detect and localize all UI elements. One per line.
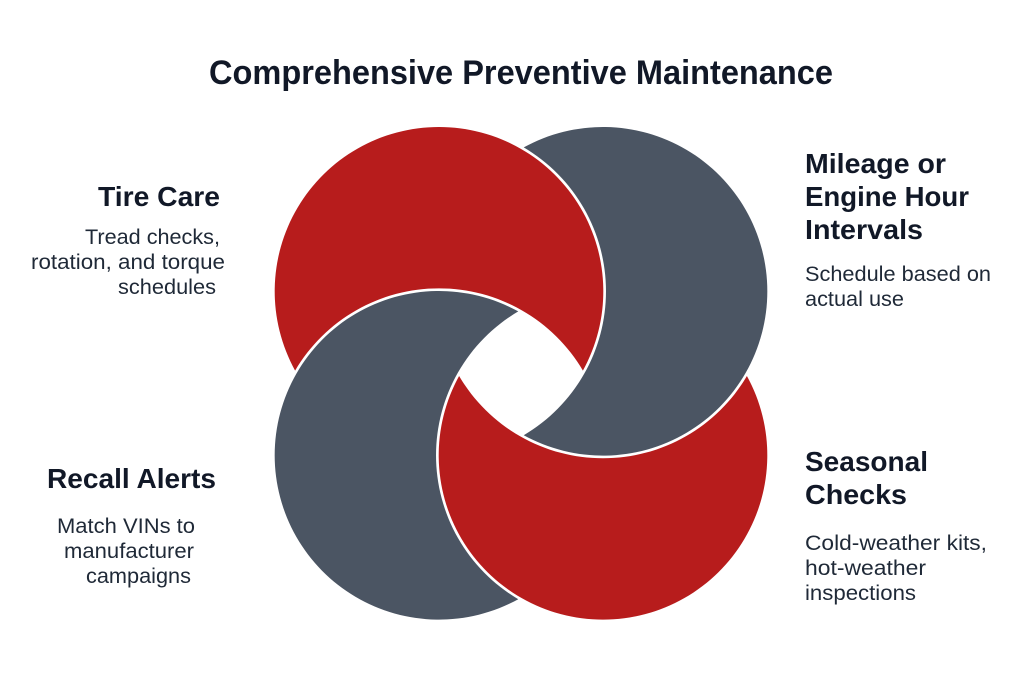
description: Recall Alerts: Match VINs to: [57, 515, 195, 538]
description: Recall Alerts: [57, 515, 195, 588]
label: Seasonal Checks: [805, 446, 987, 605]
description: Tire Care: [31, 226, 225, 299]
heading: Tire Care: Tire Care: [98, 181, 220, 212]
title: Comprehensive Preventive Maintenance: [209, 54, 833, 92]
description: Mileage: Schedule based on: [805, 263, 991, 286]
heading: Mileage or Engine Hour Intervals: Mileage or: [805, 148, 946, 179]
description: Seasonal Checks: hot-weather: [805, 557, 926, 580]
heading: Seasonal Checks: [805, 446, 928, 510]
segment: top-left red: [275, 127, 603, 371]
description: Mileage: actual use: [805, 288, 904, 311]
label: Mileage or Engine Hour Intervals: [805, 148, 991, 311]
description: Recall Alerts: campaigns: [86, 565, 191, 588]
description: Seasonal Checks: Cold-weather kits,: [805, 532, 987, 555]
segment: bottom-left gray: [275, 291, 518, 620]
heading: Recall Alerts: Recall Alerts: [47, 463, 216, 494]
description: Mileage: [805, 263, 991, 311]
description: Tire Care: schedules: [118, 276, 216, 299]
heading: Mileage or Engine Hour Intervals: Engine Hour: [805, 181, 969, 212]
description: Tire Care: Tread checks,: [85, 226, 220, 249]
heading: Seasonal Checks: Seasonal: [805, 446, 928, 477]
description: Seasonal Checks: inspections: [805, 582, 916, 605]
description: Recall Alerts: manufacturer: [64, 540, 194, 563]
heading: Mileage or Engine Hour Intervals: [805, 148, 969, 245]
heading: Mileage or Engine Hour Intervals: Intervals: [805, 214, 923, 245]
description: Tire Care: rotation, and torque: [31, 251, 225, 274]
heading: Seasonal Checks: Checks: [805, 479, 907, 510]
segment: top-right gray: [524, 127, 767, 456]
label: Recall Alerts: [47, 463, 216, 588]
segment: bottom-right red: [439, 376, 767, 620]
label: Tire Care: [31, 181, 225, 299]
interlocking circles diagram: [275, 127, 767, 620]
description: Seasonal Checks: [805, 532, 987, 605]
